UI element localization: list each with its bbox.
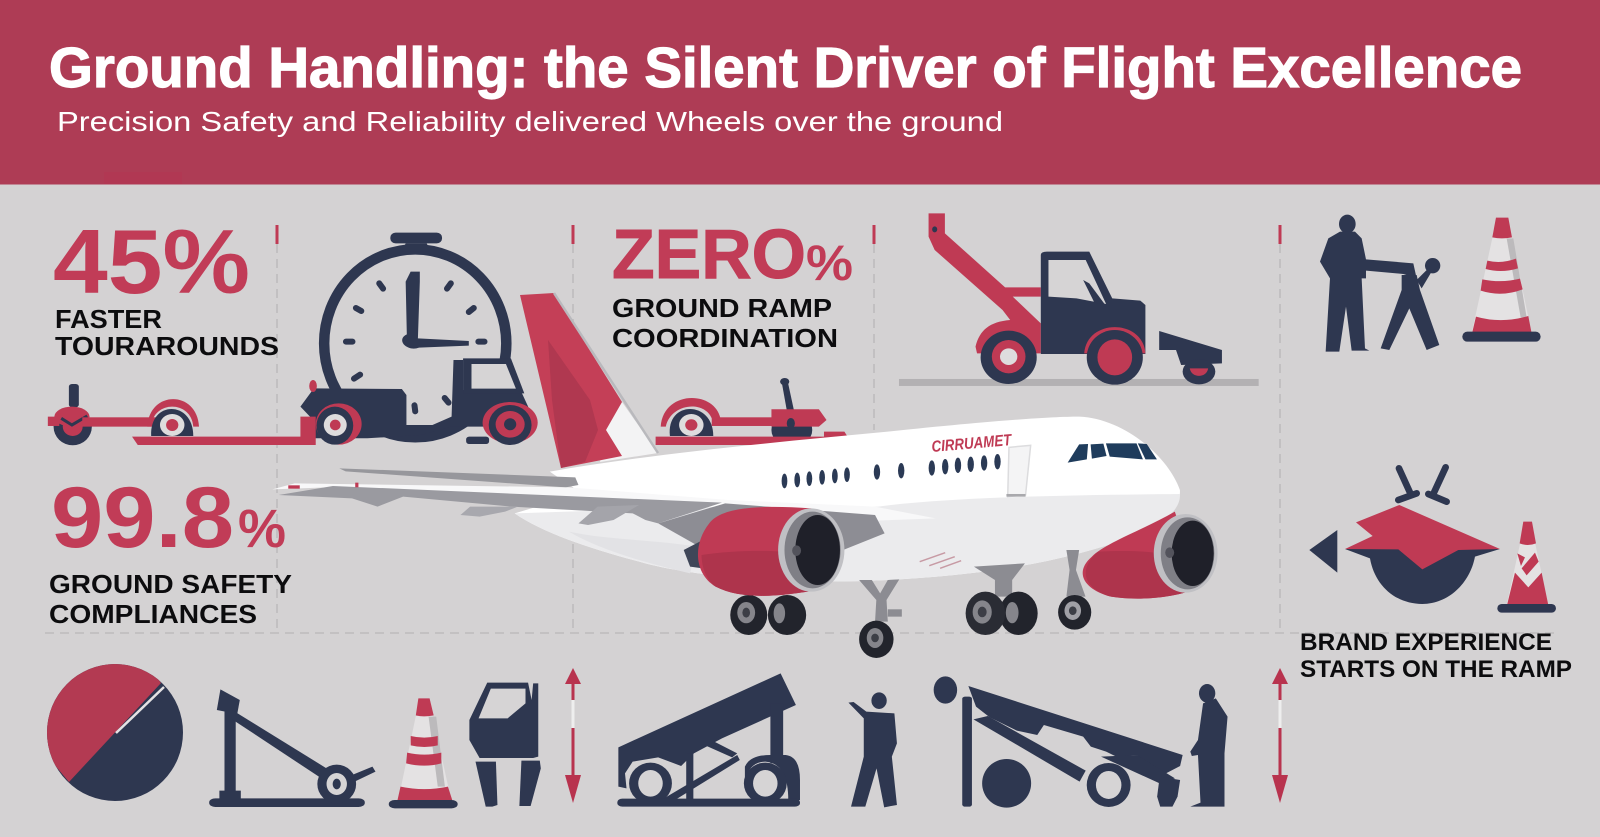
icon: worker with barrier	[1320, 215, 1440, 352]
stat: zero% ground ramp coordination: COORDINATION	[612, 323, 838, 353]
double arrow right	[1272, 668, 1288, 803]
door	[1008, 445, 1031, 497]
fuselage markings	[920, 553, 961, 568]
icon: baggage cart right	[656, 378, 848, 447]
wing	[272, 483, 936, 550]
icon: hat and pointer emblem	[1309, 467, 1500, 604]
icon: tractor with boom arm	[899, 213, 1259, 386]
stat: 99.8% ground safety compliances: %	[238, 499, 286, 559]
title: Ground Handling: the Silent Driver of Flight Excellence	[49, 36, 1522, 100]
icon: standing worker	[1190, 684, 1228, 807]
left engine	[684, 507, 844, 596]
callout: brand experience	[1300, 629, 1572, 683]
icon: pie chart	[47, 664, 183, 801]
struts	[859, 550, 1086, 622]
stat: zero% ground ramp coordination	[612, 215, 853, 353]
stat: 99.8% ground safety compliances: 99.8	[51, 470, 234, 566]
icon: waving worker	[848, 692, 897, 807]
icon: baggage cart left	[48, 384, 316, 445]
stat: 99.8% ground safety compliances	[49, 470, 292, 629]
icon: stopwatch with tug	[300, 233, 538, 445]
icon: vehicle door	[469, 683, 541, 807]
callout: brand experience: BRAND EXPERIENCE	[1300, 629, 1552, 656]
subtitle: Precision Safety and Reliability delivered Wheels over the ground	[57, 106, 1003, 137]
stat: 45% faster turnarounds: 45%	[53, 212, 250, 313]
icon: tow bar stand	[209, 689, 376, 807]
tail fin	[520, 293, 658, 468]
callout: brand experience: STARTS ON THE RAMP	[1300, 656, 1572, 683]
stat: 45% faster turnarounds	[53, 212, 279, 361]
landing gear wheels	[730, 592, 1091, 658]
stat: 45% faster turnarounds: FASTER	[55, 304, 162, 334]
icon: traffic cone top right	[1462, 218, 1541, 342]
header banner	[0, 0, 1600, 184]
stat: 99.8% ground safety compliances: GROUND SAFETY	[49, 569, 292, 599]
stat: 45% faster turnarounds: TOURAROUNDS	[55, 331, 279, 361]
airplane	[272, 293, 1218, 658]
cockpit windows	[1068, 443, 1157, 463]
stat: 99.8% ground safety compliances: COMPLIANCES	[49, 599, 257, 629]
double arrow middle	[565, 668, 581, 803]
icon: cone middle right	[1497, 522, 1556, 613]
stat: zero% ground ramp coordination: GROUND RAMP	[612, 293, 832, 323]
right engine	[1083, 512, 1218, 599]
icon: traffic cone bottom	[389, 698, 458, 808]
fuselage	[515, 417, 1180, 581]
airline name: CIRRUAMET	[931, 432, 1013, 456]
stabilizer	[339, 468, 578, 487]
stat: zero% ground ramp coordination: ZERO	[612, 215, 806, 293]
stat: zero% ground ramp coordination: %	[806, 235, 853, 291]
windows	[782, 454, 1001, 488]
icon: air stairs truck	[617, 673, 800, 807]
icon: belt loader	[934, 676, 1183, 808]
